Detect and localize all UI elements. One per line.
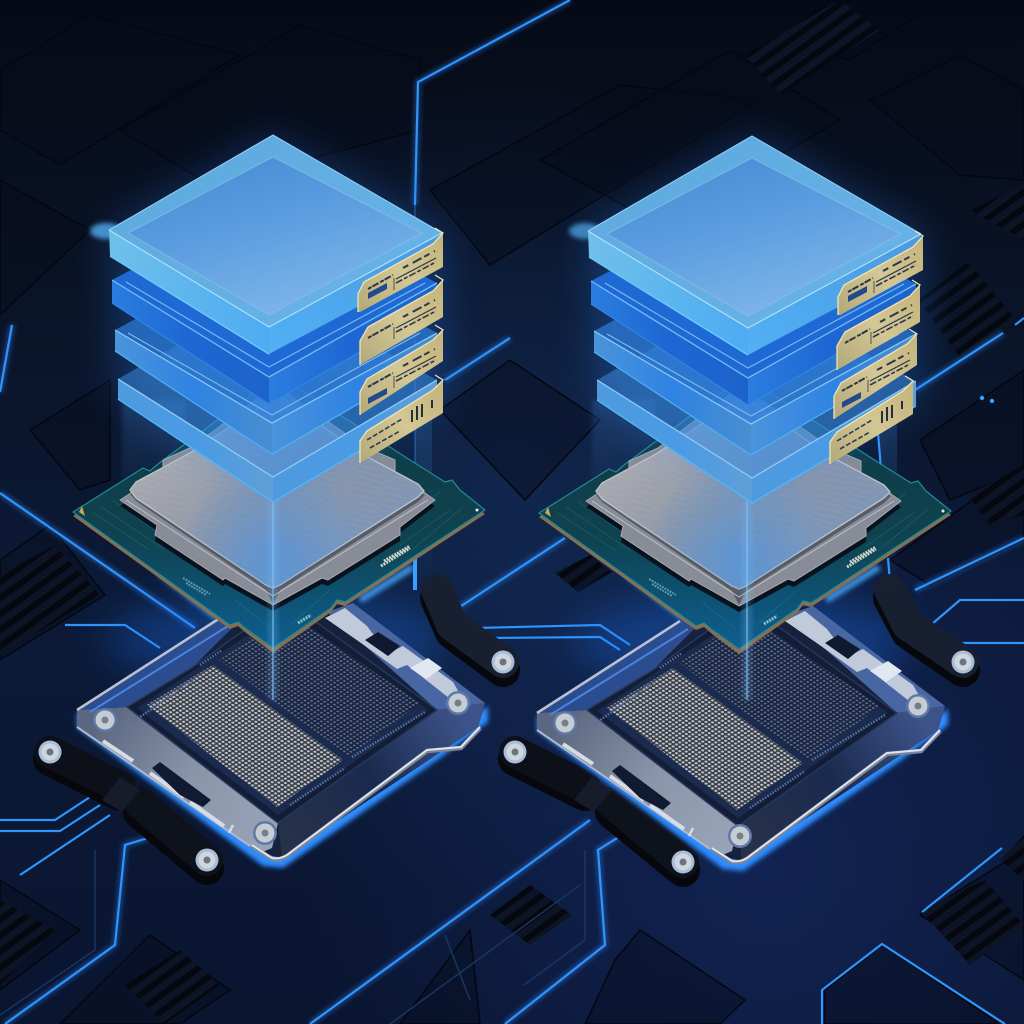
central light rays: [268, 500, 752, 700]
left CPU: [73, 375, 485, 653]
left socket assembly: [38, 590, 514, 872]
left CPU glow: [160, 567, 413, 617]
right socket screws: [553, 694, 930, 848]
layer 4: [118, 290, 437, 502]
right lever arm lower right: [612, 803, 683, 870]
left lever arm lower right: [140, 803, 207, 868]
layer 2: [112, 195, 437, 404]
label tab 3: [360, 325, 443, 415]
right lever arm upper: [890, 590, 963, 670]
right layer stack: [588, 136, 923, 503]
right lever arm lower left: [515, 752, 585, 794]
layer 2: [591, 196, 916, 405]
right lever joint: [574, 777, 612, 812]
label tab 1: [838, 231, 923, 315]
left socket frame and pins: [77, 600, 488, 868]
label tab 2: [837, 280, 920, 370]
label tab 2: [360, 275, 443, 365]
glow under right socket: [575, 595, 915, 685]
dim traces: [0, 850, 585, 1024]
label tab 4: [360, 375, 443, 463]
glow under left socket: [105, 595, 445, 685]
left layer stack: [109, 135, 443, 502]
left socket screws: [93, 691, 470, 845]
right socket assembly: [504, 590, 974, 874]
stack glows: [90, 135, 922, 500]
label tab 4: [830, 376, 913, 464]
right socket frame and pins: [537, 603, 948, 871]
right CPU: [539, 376, 951, 654]
right arm screws: [504, 650, 974, 874]
left lever arm lower left: [50, 752, 120, 794]
left arm screws: [38, 650, 514, 872]
label tab 3: [834, 329, 917, 419]
status dots: [980, 396, 994, 403]
layer 3: [115, 245, 437, 454]
layer 4: [597, 291, 916, 503]
left lever arm upper: [437, 590, 503, 670]
right CPU glow: [626, 567, 879, 617]
light beams: [122, 400, 897, 590]
layer 1: [109, 135, 442, 354]
layer 1: [588, 136, 921, 355]
left lever joint: [102, 777, 140, 812]
layer 3: [594, 246, 916, 455]
label tab 1: [358, 228, 443, 312]
